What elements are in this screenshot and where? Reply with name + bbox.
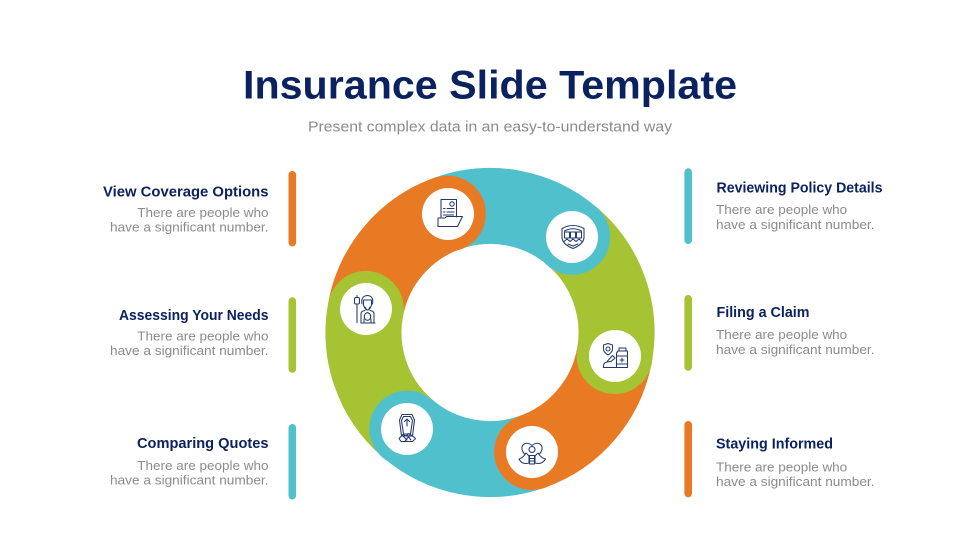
description bbox=[110, 205, 268, 235]
ring segment: teal bottom bbox=[407, 428, 532, 459]
description bbox=[716, 202, 874, 232]
ring segment: green right bbox=[572, 236, 617, 355]
title: Insurance Slide Template bbox=[243, 64, 737, 108]
description bbox=[716, 460, 874, 489]
heading: Assessing Your Needs bbox=[119, 308, 268, 324]
panel: Assessing Your Needs bbox=[110, 297, 296, 373]
description bbox=[716, 327, 874, 357]
description: There are people who bbox=[716, 327, 847, 342]
description bbox=[110, 328, 268, 358]
cap: orange at folder bbox=[410, 176, 486, 252]
bar bbox=[684, 421, 692, 497]
description bbox=[110, 458, 268, 487]
description: There are people who bbox=[137, 458, 268, 473]
ring segment: orange upper left bbox=[366, 213, 448, 308]
description: have a significant number. bbox=[716, 474, 874, 489]
description: have a significant number. bbox=[110, 472, 268, 487]
cap: orange at heart bbox=[494, 414, 570, 490]
description: There are people who bbox=[137, 205, 268, 220]
icon: folder with document bbox=[422, 188, 474, 240]
icon: coffin with flowers bbox=[381, 403, 433, 455]
cap: teal at coffin bbox=[369, 391, 445, 467]
description: There are people who bbox=[137, 328, 268, 343]
description: have a significant number. bbox=[110, 220, 268, 235]
cap: green at person bbox=[328, 271, 404, 347]
panel: View Coverage Options bbox=[103, 171, 296, 246]
panel: Staying Informed bbox=[684, 421, 874, 497]
bar bbox=[684, 168, 692, 244]
bar bbox=[288, 171, 296, 246]
description: have a significant number. bbox=[110, 343, 268, 358]
panel: Comparing Quotes bbox=[110, 424, 296, 500]
bar bbox=[288, 297, 296, 373]
panel: Reviewing Policy Details bbox=[684, 168, 882, 244]
panel: Filing a Claim bbox=[684, 295, 874, 371]
icon: shield with people bbox=[546, 211, 598, 263]
cap: teal at shield bbox=[534, 199, 610, 275]
ring segment: teal top bbox=[448, 206, 572, 236]
heading: View Coverage Options bbox=[103, 184, 268, 200]
icon: heart with hands bbox=[506, 426, 558, 478]
heading: Reviewing Policy Details bbox=[716, 181, 882, 197]
heading: Staying Informed bbox=[716, 436, 833, 452]
circular ring diagram bbox=[328, 176, 653, 490]
cap: green at medicine bbox=[577, 318, 653, 394]
description: have a significant number. bbox=[716, 342, 874, 357]
subtitle: Present complex data in an easy-to-understand way bbox=[308, 118, 673, 136]
icon: patient with IV drip bbox=[340, 283, 392, 335]
heading: Filing a Claim bbox=[716, 305, 810, 321]
icon: medicine bottle and shield bbox=[589, 330, 641, 382]
description: have a significant number. bbox=[716, 217, 874, 232]
ring segment: green left bbox=[363, 308, 407, 428]
description: There are people who bbox=[716, 202, 847, 217]
ring segment: orange lower right bbox=[532, 355, 614, 452]
description: There are people who bbox=[716, 460, 847, 475]
heading: Comparing Quotes bbox=[137, 436, 268, 452]
bar bbox=[288, 424, 296, 500]
bar bbox=[684, 295, 692, 371]
